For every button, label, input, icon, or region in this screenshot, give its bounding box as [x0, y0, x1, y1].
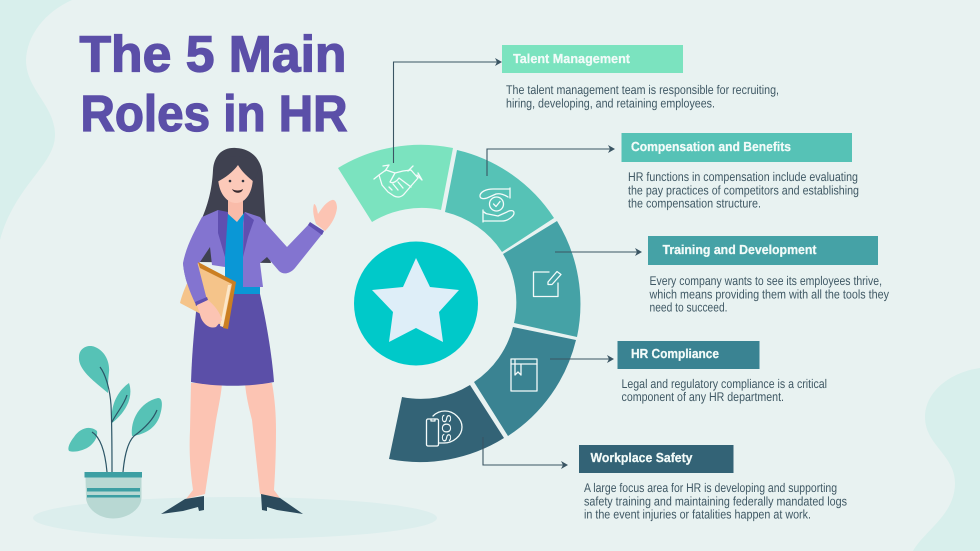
icon: handshake	[374, 165, 422, 197]
illustration: woman with folder	[161, 148, 337, 514]
panel: workplace safety: Workplace Safety	[590, 450, 693, 465]
skirt	[191, 294, 274, 386]
text: compensation description: HR functions in compensation include evaluating	[628, 170, 858, 184]
segment: HR compliance	[474, 327, 576, 436]
icon: hands holding coin	[480, 188, 514, 222]
text: compensation description: the pay practices of competitors and establishing	[628, 184, 859, 198]
folder	[180, 263, 235, 328]
panel: compensation and benefits: Compensation and Benefits	[631, 139, 791, 154]
text: compliance description: Legal and regulatory compliance is a critical	[622, 377, 827, 391]
title: The 5 Main	[80, 26, 346, 82]
text: training description: Every company wants to see its employees thrive,	[650, 274, 882, 288]
icon: SOS phone: SOS	[439, 414, 454, 442]
text: talent management description: The talent management team is responsible for recruiting,	[506, 83, 779, 97]
panel: HR compliance: HR Compliance	[631, 346, 719, 361]
arrow: workplace safety	[483, 437, 568, 469]
hand	[313, 200, 337, 231]
donut chart: five HR roles	[338, 145, 580, 462]
panel: HR compliance	[618, 341, 827, 404]
title: Roles in HR	[80, 85, 348, 142]
panel: talent management: Talent Management	[513, 51, 631, 66]
text: compliance description	[622, 377, 827, 404]
segment: talent management	[338, 145, 453, 222]
jacket	[183, 210, 227, 303]
legs	[186, 383, 222, 499]
segment: training and development	[503, 221, 580, 337]
hair	[199, 148, 271, 263]
segment: compensation and benefits	[445, 150, 554, 252]
icon: note with pencil	[534, 272, 561, 296]
text: talent management description: hiring, developing, and retaining employees.	[506, 96, 715, 110]
text: safety description: safety training and maintaining federally mandated logs	[584, 494, 847, 508]
arm and hand over folder	[183, 262, 207, 303]
text: training description: need to succeed.	[650, 300, 728, 314]
shoes	[161, 496, 204, 514]
title	[80, 26, 348, 142]
arrow: training and development	[555, 248, 642, 256]
arrow: compensation and benefits	[487, 145, 615, 176]
face and neck	[228, 195, 243, 224]
text: safety description: A large focus area for HR is developing and supporting	[584, 481, 837, 495]
icon: book	[511, 359, 537, 391]
illustration: potted plant	[68, 346, 162, 518]
text: safety description	[584, 481, 847, 522]
text: talent management description	[506, 83, 779, 110]
text: compensation description: the compensation structure.	[628, 196, 761, 210]
shirt	[225, 213, 260, 294]
text: compliance description: component of any HR department.	[622, 390, 784, 404]
panel: compensation and benefits	[622, 133, 859, 210]
text: training description	[649, 274, 890, 314]
arrow: talent management	[394, 58, 502, 163]
panel: workplace safety	[579, 445, 847, 522]
arrow: HR compliance	[550, 355, 614, 363]
segment: workplace safety	[389, 385, 504, 462]
text: training description: which means providing them with all the tools they	[649, 288, 890, 302]
panel: training and development	[648, 236, 890, 314]
text: compensation description	[628, 170, 859, 210]
text: safety description: in the event injuries or fatalities happen at work.	[584, 508, 811, 522]
center circle with star	[354, 242, 478, 366]
panel: talent management	[502, 45, 779, 110]
panel: training and development: Training and Development	[662, 242, 817, 257]
